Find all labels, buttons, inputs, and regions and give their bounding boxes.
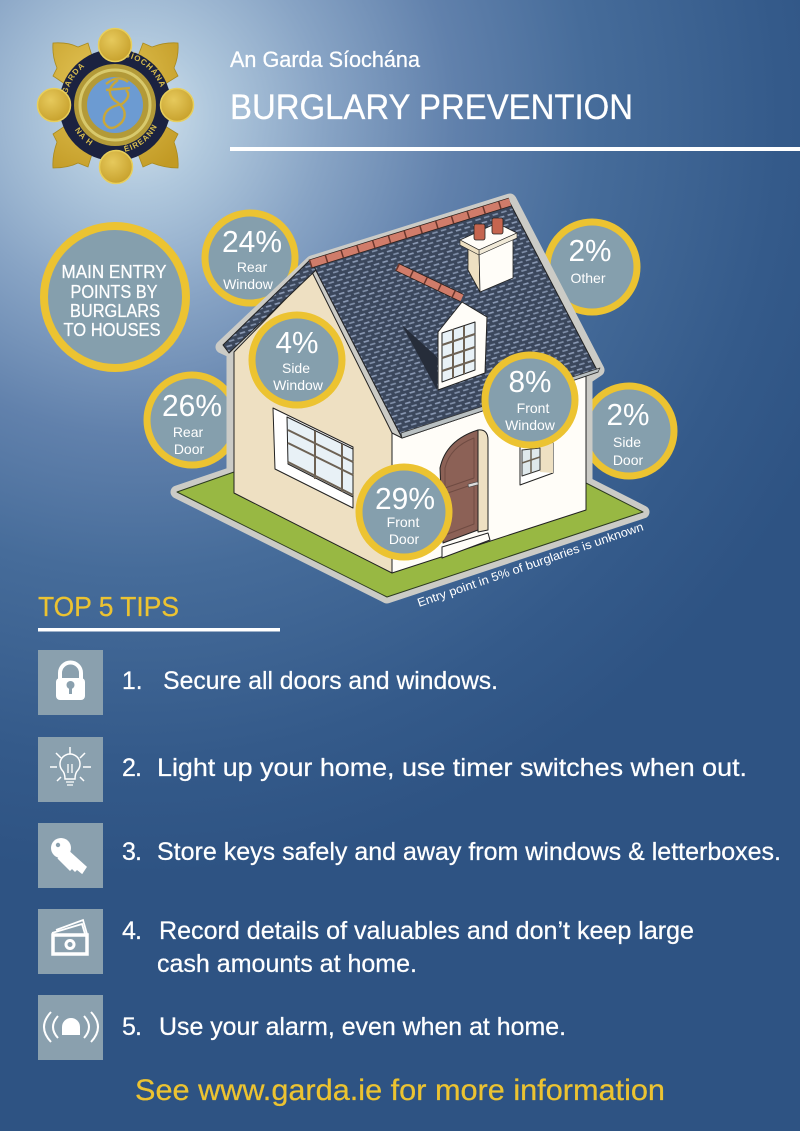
icon: alarm bbox=[38, 995, 103, 1060]
stat: 8% front window bbox=[485, 355, 575, 445]
stat: 4% side window: Window bbox=[273, 377, 324, 393]
stat: 8% front window: 8% bbox=[508, 364, 552, 399]
callout: main entry points: BURGLARS bbox=[70, 300, 160, 321]
tip 4: 4. bbox=[122, 917, 142, 945]
stat: 26% rear door: 26% bbox=[162, 388, 222, 423]
tip 3: 3. bbox=[122, 838, 142, 866]
icon: Garda badge: ÉIREANN bbox=[124, 124, 157, 152]
icon: padlock bbox=[38, 650, 103, 715]
stat: 24% rear window bbox=[205, 213, 295, 303]
tip 4: Record details of valuables and don’t keep large bbox=[159, 917, 694, 945]
front window bbox=[520, 443, 553, 485]
organisation name: An Garda Síochána bbox=[230, 47, 421, 72]
fascia bbox=[401, 368, 600, 438]
title: BURGLARY PREVENTION bbox=[230, 88, 633, 127]
stat: 4% side window bbox=[252, 315, 342, 405]
tip 5 bbox=[38, 995, 566, 1060]
stat: 29% front door: Door bbox=[389, 531, 420, 547]
tip 5: 5. bbox=[122, 1013, 142, 1041]
stat: 24% rear window: Window bbox=[223, 276, 274, 292]
stat: 29% front door: 29% bbox=[375, 481, 435, 516]
stat: 4% side window: 4% bbox=[276, 325, 318, 360]
stat: 2% side door: Side bbox=[613, 434, 641, 450]
tip 1: 1. Secure all doors and windows. bbox=[122, 667, 498, 695]
gable window bbox=[273, 408, 353, 508]
tip 4 bbox=[38, 909, 694, 978]
gable wall bbox=[234, 272, 392, 573]
house illustration bbox=[177, 200, 643, 597]
icon: Garda badge: GARDA bbox=[62, 64, 84, 94]
stat: 8% front window: Window bbox=[505, 417, 556, 433]
stat: 29% front door bbox=[359, 467, 449, 557]
stat: 2% side door: 2% bbox=[606, 397, 650, 432]
tip 2: Light up your home, use timer switches when out. bbox=[157, 754, 747, 782]
icon: Garda badge: NA H bbox=[75, 127, 93, 146]
callout: main entry points: TO HOUSES bbox=[64, 319, 160, 340]
stat: 2% side door: Door bbox=[613, 452, 644, 468]
stat: 4% side window: Side bbox=[282, 360, 310, 376]
stat: 29% front door: Front bbox=[387, 514, 419, 530]
tip 4: cash amounts at home. bbox=[157, 950, 417, 978]
icon: key bbox=[38, 823, 103, 888]
stat: 2% other: 2% bbox=[568, 233, 612, 268]
icon: banknotes bbox=[38, 909, 103, 974]
stat: 26% rear door: Rear bbox=[173, 424, 204, 440]
front wall bbox=[392, 376, 586, 573]
tips heading: TOP 5 TIPS bbox=[38, 591, 179, 622]
icon: Garda badge bbox=[36, 28, 194, 184]
tip 2 bbox=[38, 737, 747, 802]
callout: main entry points bbox=[44, 226, 186, 368]
icon: Garda badge: SÍOCHÁNA bbox=[127, 52, 165, 88]
stat: 24% rear window: Rear bbox=[237, 259, 268, 275]
tip 3 bbox=[38, 823, 781, 888]
stat: 8% front window: Front bbox=[517, 400, 549, 416]
ridge tiles bbox=[310, 202, 510, 264]
stat: 26% rear door: Door bbox=[174, 441, 205, 457]
roof bbox=[312, 203, 598, 438]
tip 1 bbox=[38, 650, 498, 715]
footnote: Entry point in 5% of burglaries is unknown bbox=[415, 520, 645, 610]
front door bbox=[440, 430, 490, 558]
verge bbox=[223, 260, 316, 353]
chimney bbox=[460, 218, 517, 292]
stat: 2% other bbox=[547, 222, 637, 312]
tip 3: Store keys safely and away from windows & letterboxes. bbox=[157, 838, 781, 866]
dormer bbox=[393, 267, 487, 390]
callout: main entry points: POINTS BY bbox=[70, 281, 158, 302]
stat: 2% side door bbox=[584, 386, 674, 476]
stat: 24% rear window: 24% bbox=[222, 224, 282, 259]
footer link: See www.garda.ie for more information bbox=[135, 1074, 665, 1107]
icon: light bulb bbox=[38, 737, 103, 802]
stat: 26% rear door bbox=[147, 375, 237, 465]
tip 2: 2. bbox=[122, 754, 142, 782]
tip 5: Use your alarm, even when at home. bbox=[159, 1013, 566, 1041]
callout: main entry points: MAIN ENTRY bbox=[62, 261, 166, 282]
stat: 2% other: Other bbox=[570, 270, 606, 286]
lawn bbox=[177, 472, 643, 597]
